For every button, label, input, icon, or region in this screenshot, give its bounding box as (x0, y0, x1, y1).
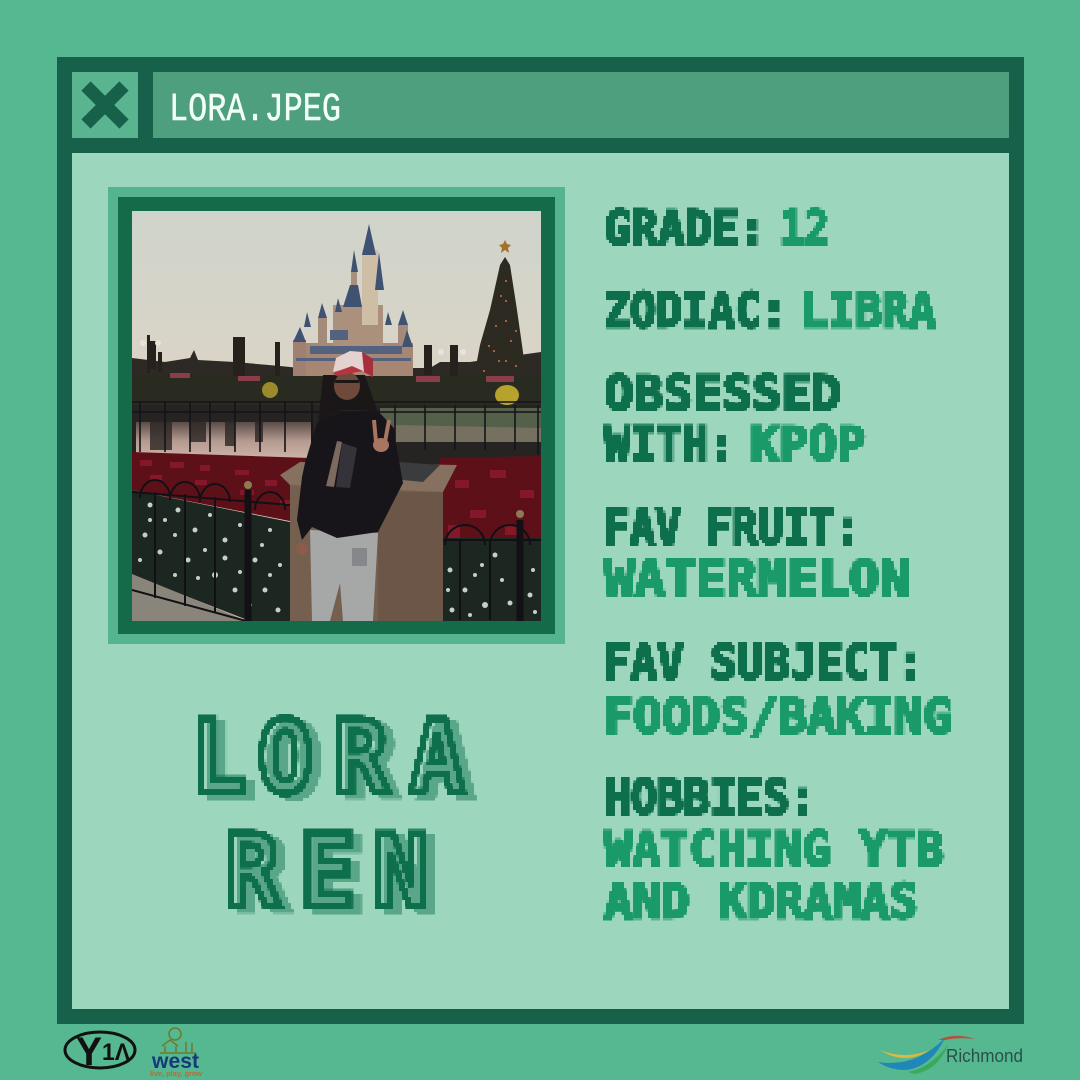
logo: Richmond: Richmond (946, 1046, 1023, 1066)
window content area (72, 153, 1009, 1009)
logo: Y1A: 1Λ (102, 1039, 130, 1066)
obsessed with: OBSESSED (604, 366, 841, 422)
logo: Richmond (878, 1036, 1023, 1074)
zodiac: ZODIAC: (604, 283, 787, 339)
logo: west: live, play, grow (150, 1071, 203, 1078)
sidewalk (132, 574, 245, 621)
grade: GRADE: (604, 201, 766, 257)
name shadow (199, 703, 474, 934)
favourite subject: FAV SUBJECT: (604, 635, 923, 691)
logo: Y1A (65, 1030, 135, 1074)
photo frame (108, 187, 565, 644)
grade: 12 (779, 201, 829, 257)
favourite subject: FOODS/BAKING (604, 689, 952, 745)
title bar: LORA.JPEG (169, 88, 341, 133)
photo: girl in front of castle (132, 211, 541, 622)
name outline: REN (224, 813, 429, 930)
girl (296, 351, 403, 621)
name: LORA REN (190, 699, 474, 934)
obsessed with (604, 366, 866, 473)
obsessed with: KPOP (750, 417, 866, 473)
hobbies: AND KDRAMAS (604, 874, 918, 930)
hobbies: HOBBIES: (604, 770, 816, 826)
name outline (190, 699, 465, 930)
distant skyline (132, 350, 541, 376)
name outline: LORA (190, 699, 465, 816)
stone pedestal (280, 461, 457, 621)
logo: west: west (151, 1050, 199, 1073)
midground trees (233, 376, 458, 380)
title bar (153, 72, 1009, 138)
favourite fruit: FAV FRUIT: (604, 500, 860, 556)
red flower bed (132, 452, 310, 525)
white flower bed (132, 490, 290, 621)
favourite fruit (604, 500, 910, 607)
favourite fruit: WATERMELON (604, 551, 910, 607)
zodiac: LIBRA (801, 283, 936, 339)
logo: Y1A: Y (76, 1030, 102, 1074)
hobbies: WATCHING YTB (604, 822, 944, 878)
hobbies (604, 770, 944, 930)
pond fence (132, 402, 541, 455)
lawn and pond (132, 412, 541, 465)
name shadow: REN (233, 817, 438, 934)
details list (604, 201, 952, 930)
favourite subject (604, 635, 952, 745)
obsessed with: WITH: (604, 417, 734, 473)
zodiac (604, 283, 936, 339)
lower fence (132, 480, 541, 622)
Christmas tree (477, 240, 524, 372)
logo: west (150, 1028, 203, 1078)
close button with X icon (72, 72, 138, 138)
castle (293, 224, 413, 376)
name shadow: LORA (199, 703, 474, 820)
